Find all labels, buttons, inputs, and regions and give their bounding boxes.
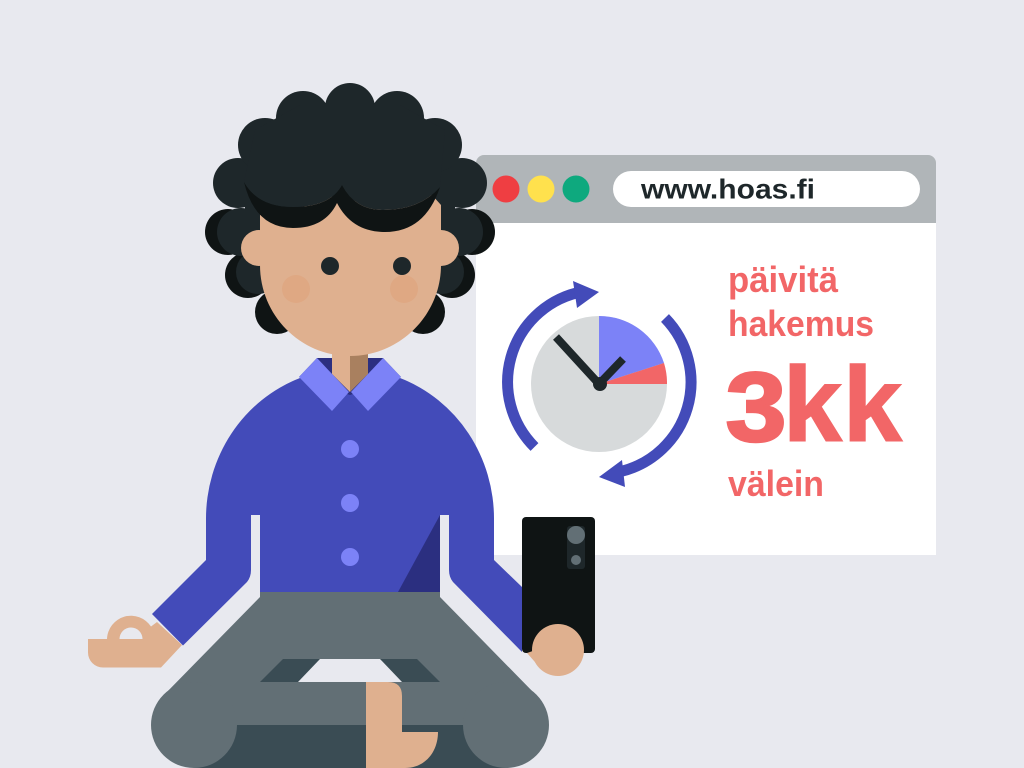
browser title bar bbox=[476, 155, 936, 223]
figure: meditating person bbox=[88, 83, 595, 768]
hair fringe bbox=[244, 182, 440, 232]
blue clock sector bbox=[599, 316, 664, 384]
shirt buttons bbox=[341, 440, 359, 566]
ears bbox=[241, 230, 459, 266]
red clock sector bbox=[599, 363, 667, 384]
right refresh arrow bbox=[599, 318, 691, 487]
hair back bbox=[205, 209, 495, 334]
foot bbox=[366, 682, 438, 768]
browser page body bbox=[476, 215, 936, 555]
window buttons bbox=[492, 176, 590, 202]
message text: päivitä bbox=[728, 259, 839, 300]
pants legs bbox=[164, 592, 536, 725]
leg gap bbox=[298, 659, 402, 682]
eyes bbox=[321, 257, 411, 275]
address bar bbox=[613, 171, 920, 207]
clock face bbox=[531, 316, 667, 452]
message text: välein bbox=[728, 463, 824, 504]
clock hands bbox=[556, 337, 623, 387]
left refresh arrow bbox=[508, 281, 599, 447]
right hand bbox=[527, 624, 584, 676]
neck bbox=[332, 345, 368, 392]
leg gap shadow bbox=[260, 659, 440, 682]
message text: k bbox=[843, 346, 903, 464]
hair sides bbox=[213, 158, 487, 294]
collar back bbox=[299, 358, 401, 395]
message text: 3 bbox=[726, 353, 787, 463]
message text: hakemus bbox=[728, 303, 874, 344]
hair top bbox=[238, 83, 462, 210]
phone camera bbox=[567, 526, 585, 569]
message text bbox=[726, 259, 903, 504]
shirt shadow bbox=[398, 515, 440, 592]
phone bbox=[522, 517, 595, 653]
shirt torso and sleeves bbox=[152, 378, 522, 652]
face bbox=[260, 195, 441, 356]
message text: k bbox=[783, 346, 843, 464]
left hand bbox=[88, 616, 182, 668]
cheeks bbox=[282, 275, 418, 303]
panel: browser window bbox=[476, 155, 936, 555]
pants lower shadow bbox=[194, 720, 506, 768]
pants bbox=[151, 592, 549, 768]
collar bbox=[299, 358, 401, 411]
address bar: www.hoas.fi bbox=[640, 174, 815, 204]
clock with refresh arrows bbox=[508, 281, 691, 487]
